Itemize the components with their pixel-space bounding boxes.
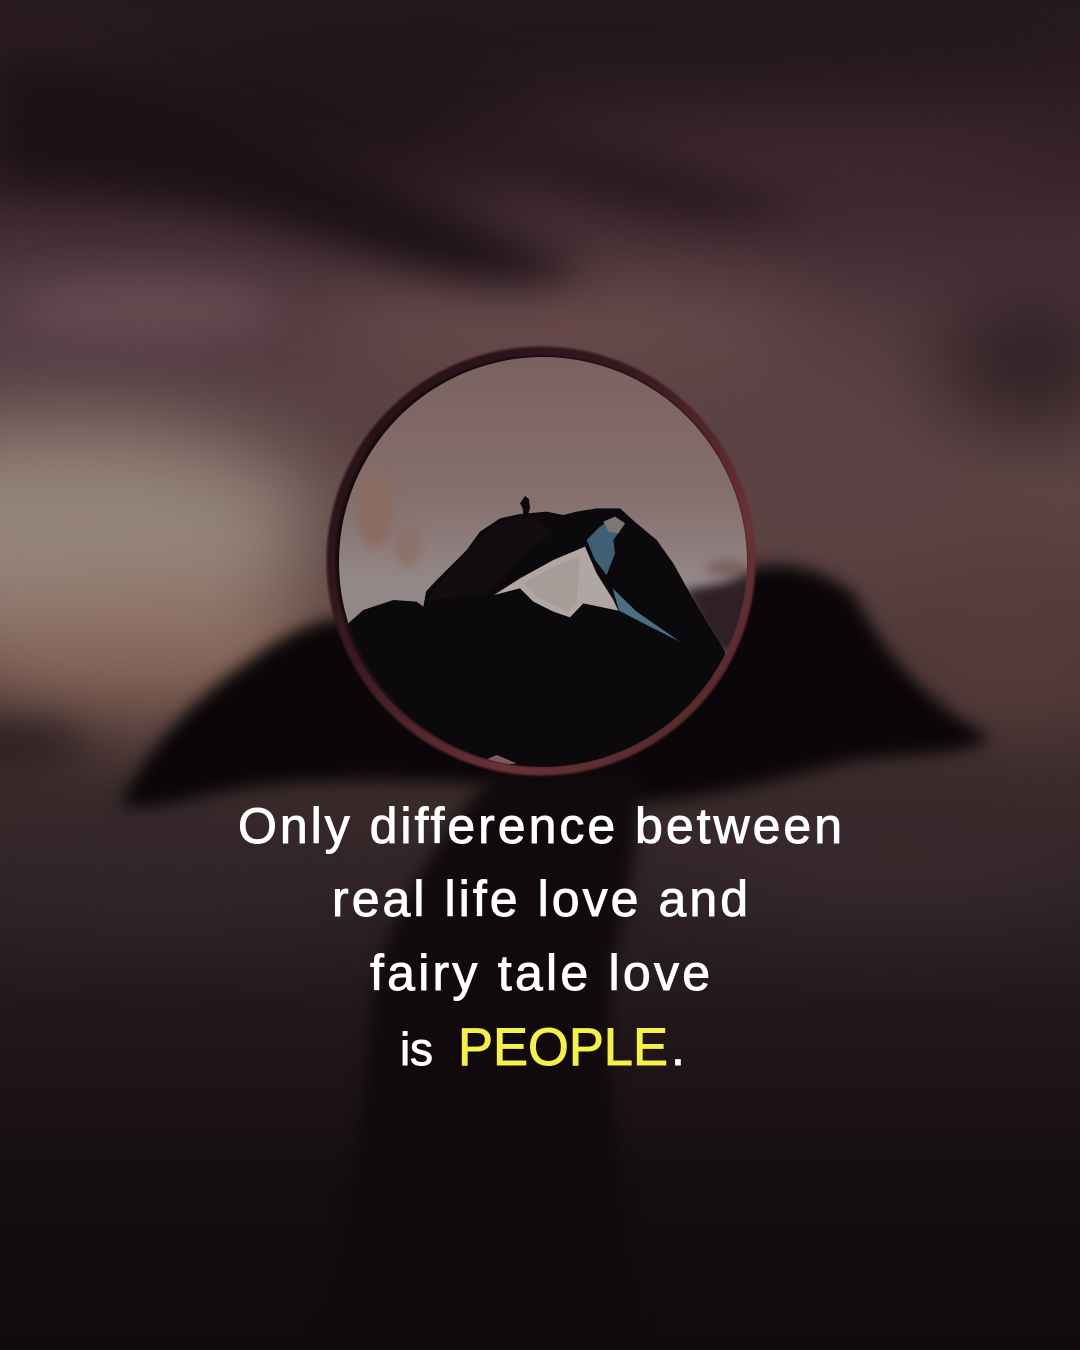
blurred hand holding the lens	[320, 770, 640, 1350]
period: .	[671, 1020, 685, 1076]
highlighted word: PEOPLE: PEOPLE	[458, 1018, 668, 1077]
blurred mountain silhouette	[120, 565, 990, 807]
quote line 1: Only difference between	[238, 798, 842, 854]
lens rim	[331, 351, 751, 771]
quote line 3: fairy tale love	[370, 945, 710, 1001]
lens scene	[330, 350, 760, 780]
blue ice upper	[587, 517, 625, 575]
lens bottom reflection	[487, 755, 516, 764]
quote line 4: is: is	[400, 1023, 433, 1075]
magnifying lens	[330, 350, 760, 780]
quote text	[238, 798, 842, 1077]
blue ice lower	[613, 588, 680, 642]
snow face	[494, 547, 618, 617]
lens mountain	[348, 496, 725, 780]
lens sky	[330, 350, 760, 780]
hiker	[520, 496, 530, 515]
quote line 2: real life love and	[332, 871, 748, 927]
lens sky tint	[357, 472, 760, 660]
